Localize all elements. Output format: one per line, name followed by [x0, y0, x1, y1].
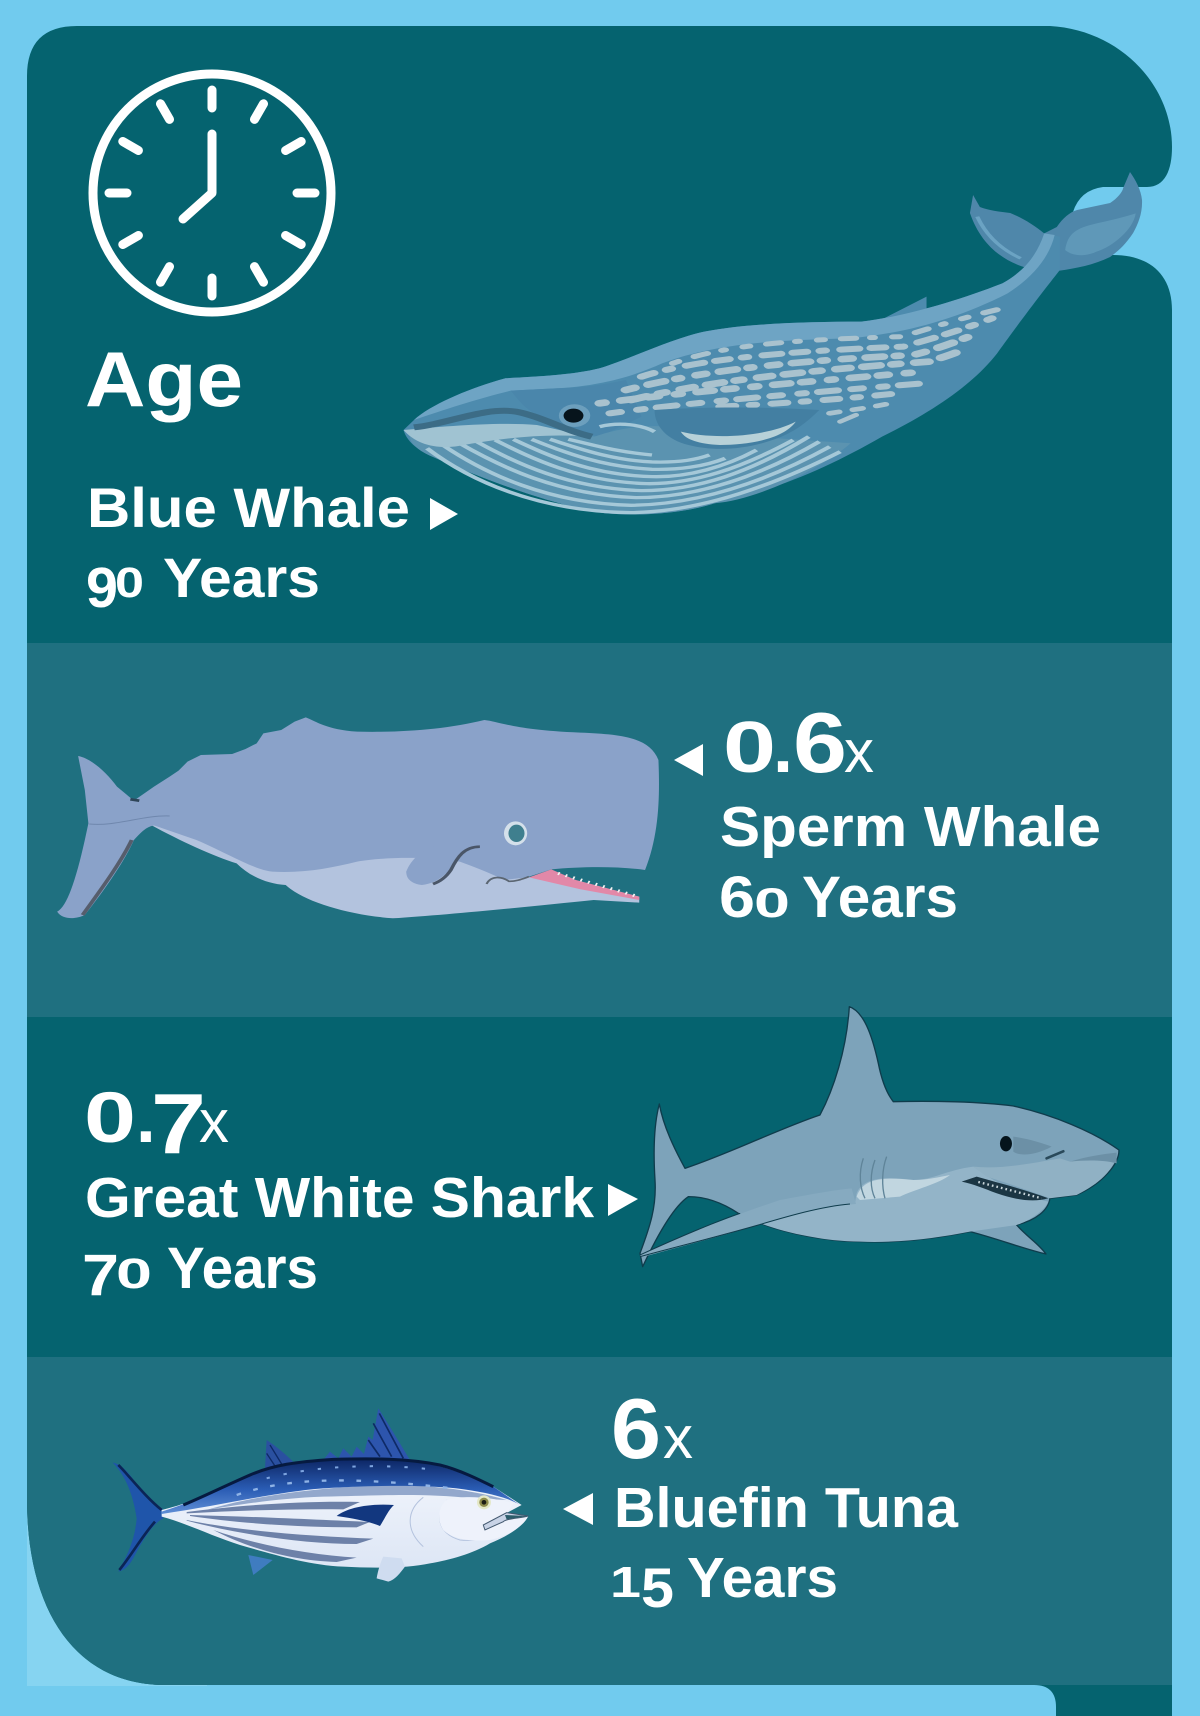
body [640, 1007, 1119, 1267]
nostril [1047, 1151, 1063, 1158]
text: sperm whale label: Years [802, 865, 958, 930]
panel: great white shark row [82, 1007, 1119, 1308]
text: tuna label: Bluefin Tuna [614, 1476, 959, 1540]
text: blue whale label: 9 [86, 556, 118, 620]
icon: sperm whale [57, 717, 659, 918]
body [57, 717, 659, 918]
mouth [962, 1177, 1048, 1200]
back edge [183, 1459, 493, 1505]
icon: great white shark [640, 1007, 1119, 1267]
text: shark label: 7 [82, 1243, 119, 1308]
arrow: points to blue whale [430, 498, 458, 530]
panel: bluefin tuna row [27, 1357, 1172, 1685]
snout patch [1013, 1137, 1052, 1154]
text: tuna label: 5 [641, 1556, 674, 1619]
arrow: points to shark [608, 1184, 638, 1216]
fins [323, 1408, 410, 1460]
icon: bluefin tuna [113, 1408, 528, 1582]
stripes [187, 1502, 373, 1562]
tail shading [83, 840, 132, 915]
text: tuna multiplier: x [663, 1404, 693, 1471]
icon: blue whale [404, 172, 1142, 515]
row background [27, 643, 1172, 1017]
belly [152, 825, 639, 918]
panel: sperm whale row [27, 643, 1172, 1017]
text: blue whale label [86, 476, 410, 620]
back [162, 1459, 520, 1514]
panel: blue whale row [85, 74, 1142, 620]
text: sperm whale multiplier: . [773, 708, 793, 788]
text: sperm whale multiplier: 6 [793, 696, 847, 791]
arrow: points to tuna [563, 1493, 593, 1525]
text: sperm whale multiplier: 0 [723, 708, 776, 788]
grey band [207, 1485, 507, 1510]
text: tuna label [610, 1476, 959, 1619]
skin spots [600, 307, 1010, 422]
text: sperm whale multiplier: x [844, 718, 874, 785]
text: shark label: 0 [116, 1250, 152, 1298]
gill lines [410, 1497, 503, 1547]
head [439, 1497, 528, 1541]
text: shark multiplier: 0 [84, 1079, 136, 1158]
body [162, 1459, 528, 1568]
head patch [511, 380, 642, 437]
text: blue whale label: Years [163, 546, 320, 609]
icon: clock [93, 74, 331, 312]
dorsal fin [879, 297, 927, 321]
eye [559, 404, 590, 427]
eye [1000, 1136, 1012, 1151]
back spots [237, 1480, 460, 1495]
eye [504, 821, 527, 845]
text: shark multiplier: . [136, 1079, 156, 1158]
body [404, 233, 1060, 515]
throat grooves [410, 426, 851, 515]
mouth line [414, 411, 592, 437]
ventral fin [377, 1557, 405, 1582]
text: sperm whale label: 0 [754, 879, 790, 926]
pectoral fin [640, 1188, 856, 1257]
heading: Age: Age [85, 335, 243, 423]
pectoral fin [655, 407, 819, 449]
text: shark label: Years [167, 1236, 318, 1301]
text: sperm whale label: 6 [719, 865, 755, 930]
decorative corner tint [27, 1500, 207, 1686]
snout underside [973, 1155, 1117, 1198]
text: shark multiplier [84, 1077, 229, 1172]
text: shark label: Great White Shark [85, 1166, 594, 1230]
lower jaw [404, 424, 589, 447]
mouth [483, 1513, 528, 1530]
back highlight [414, 233, 1055, 420]
text: sperm whale label: Sperm Whale [720, 795, 1101, 859]
row background [27, 1357, 1172, 1685]
text: blue whale label: 0 [115, 559, 144, 607]
text: tuna label: 1 [610, 1558, 641, 1607]
text: shark multiplier: 7 [151, 1077, 206, 1172]
text: tuna multiplier [611, 1382, 693, 1477]
text: shark multiplier: x [199, 1088, 229, 1155]
arrow: points to sperm whale [674, 744, 703, 776]
text: tuna multiplier: 6 [611, 1382, 661, 1477]
text: shark label [82, 1166, 594, 1308]
text: blue whale label: Blue Whale [87, 476, 410, 539]
eye [477, 1495, 491, 1509]
text: sperm whale label [719, 795, 1101, 930]
lower jaw and belly [760, 1167, 1048, 1242]
text: tuna label: Years [687, 1546, 838, 1610]
pectoral fin [337, 1505, 394, 1526]
tail flukes [970, 172, 1142, 271]
flipper [406, 844, 461, 885]
gills [860, 1157, 887, 1198]
tail [113, 1463, 163, 1572]
mouth [529, 869, 639, 900]
text: sperm whale multiplier [723, 696, 874, 791]
